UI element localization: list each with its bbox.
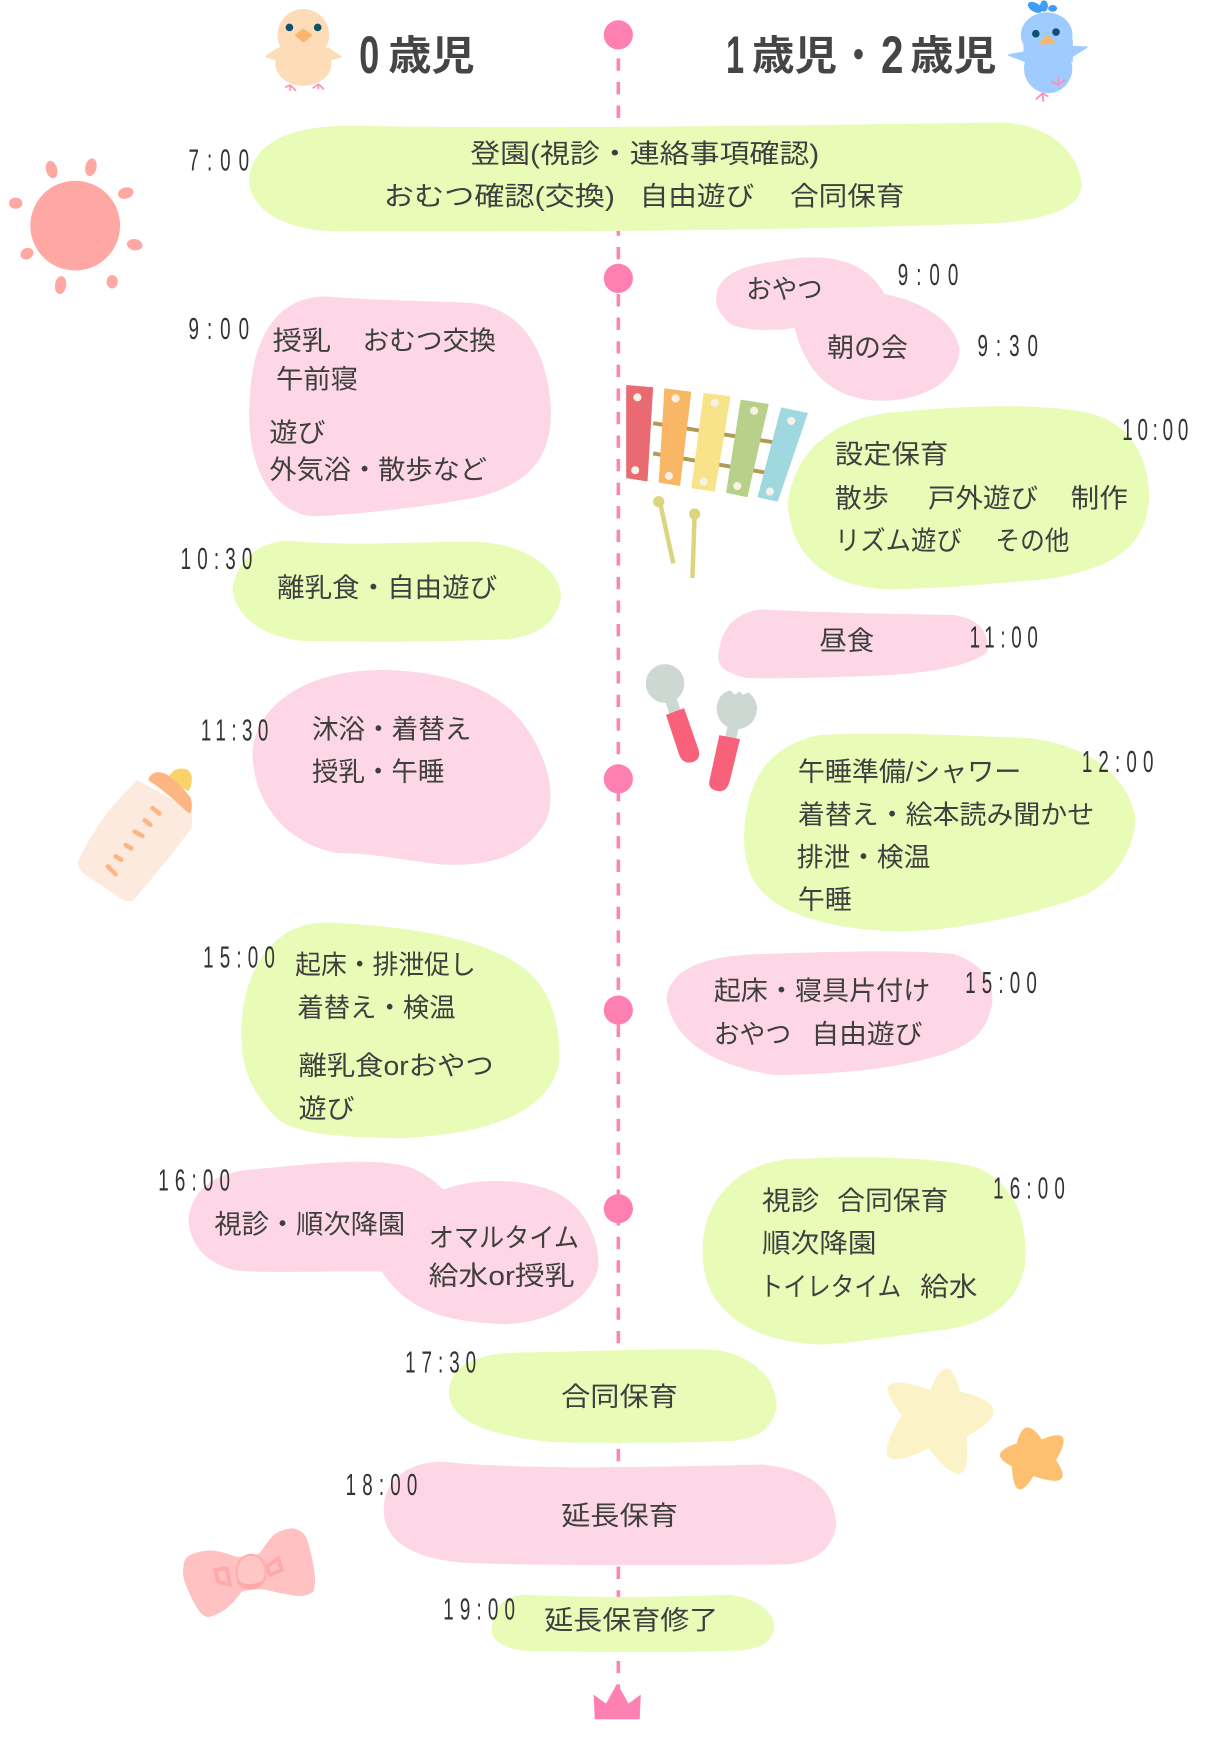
text: 起床・排泄促し: 起床・排泄促し (295, 950, 476, 980)
time: 16:00 right: 16:00 (993, 1172, 1065, 1206)
text: 登園 lines (384, 139, 905, 211)
icon: spoon (646, 664, 699, 763)
text: 離乳食・自由遊び: 離乳食・自由遊び (277, 573, 497, 603)
icon: cream star (887, 1368, 994, 1474)
text: 起床・排泄促し (295, 950, 494, 1124)
text: 合同保育: 合同保育 (561, 1382, 678, 1412)
text: 視診 合同保育: 合同保育 (837, 1186, 948, 1216)
text: 視診 合同保育: 順次降園 (762, 1228, 876, 1258)
text: 視診・順次降園: オマルタイム (429, 1223, 579, 1253)
text: 視診 合同保育 (760, 1186, 978, 1302)
timeline dots (604, 20, 633, 1223)
panel: 起床 寝具片付け (667, 951, 992, 1075)
icon: xylophone (626, 385, 808, 502)
text: 視診・順次降園: 視診・順次降園 (214, 1209, 405, 1239)
time: 16:00: 16:00 (158, 1164, 230, 1198)
text: 沐浴・着替え (312, 714, 471, 787)
text: 授乳 おむつ交換: 授乳 (273, 326, 331, 356)
text: 登園 lines: 合同保育 (790, 181, 905, 211)
heading: 1歳児・2歳児: ・ (842, 33, 875, 79)
text: 起床・寝具片付け (714, 976, 930, 1050)
panel: 昼食 (718, 609, 988, 678)
text: 起床・寝具片付け: 起床・寝具片付け (714, 976, 930, 1006)
text: おやつ 朝の会: 朝の会 (827, 333, 908, 363)
text: 設定保育: 散歩 (835, 483, 889, 513)
heading: 1歳児・2歳児: 歳児 (910, 33, 997, 79)
text: 沐浴・着替え: 授乳・午睡 (312, 757, 444, 787)
timeline dashed line (617, 35, 620, 1695)
text: 午睡準備/シャワー: 排泄・検温 (797, 842, 930, 872)
panel: 合同保育 (449, 1349, 777, 1443)
text: 授乳 おむつ交換: おむつ交換 (362, 326, 496, 356)
text: 授乳 おむつ交換: 午前寝 (276, 364, 358, 394)
text: 登園 lines: 登園(視診・連絡事項確認) (470, 139, 819, 169)
text: おやつ 朝の会 (746, 275, 908, 363)
text: 設定保育: 設定保育 (835, 440, 948, 470)
text: 起床・排泄促し: 離乳食orおやつ (299, 1051, 494, 1081)
panel: おやつ 朝の会 (716, 257, 960, 401)
icon: sun (9, 157, 143, 295)
time: 19:00: 19:00 (443, 1593, 515, 1627)
heading: 1歳児・2歳児 (726, 26, 997, 85)
panel: 0歳児 10:30 (232, 541, 561, 642)
panel: 設定保育 (788, 406, 1149, 589)
text: 視診 合同保育: 視診 (762, 1186, 819, 1216)
panel: 視診 合同保育 (703, 1157, 1026, 1344)
icon: blue bird (1009, 0, 1087, 102)
icon: bow (183, 1528, 315, 1617)
time: 15:00: 15:00 (203, 941, 275, 975)
text: 起床・排泄促し: 着替え・検温 (297, 993, 456, 1023)
heading: 1歳児・2歳児: 歳児 (752, 33, 837, 79)
panel: 登園 (249, 122, 1082, 232)
text: 昼食: 昼食 (819, 626, 874, 656)
time: 9:30: 9:30 (977, 329, 1038, 363)
text: 起床・寝具片付け: 自由遊び (811, 1020, 923, 1050)
text: 視診 合同保育: 給水 (920, 1272, 978, 1302)
heading: 1歳児・2歳児: 2 (881, 26, 903, 85)
text: 延長保育: 延長保育 (561, 1501, 678, 1531)
time: 12:00: 12:00 (1082, 746, 1153, 779)
panel: 0歳児 11:30 (252, 670, 551, 865)
text: 沐浴・着替え: 沐浴・着替え (312, 714, 471, 744)
panel: 延長保育 (384, 1462, 836, 1565)
icon: orange star (1000, 1427, 1064, 1490)
time: 7:00: 7:00 (189, 144, 249, 178)
time: 15:00 right: 15:00 (965, 967, 1037, 1000)
time: 18:00: 18:00 (346, 1468, 417, 1502)
text: 視診・順次降園: 給水or授乳 (429, 1261, 575, 1291)
text: 登園 lines: 自由遊び (640, 181, 754, 211)
icon: fork (709, 690, 757, 791)
text: 午睡準備/シャワー (797, 757, 1094, 915)
panel: 延長保育修了 (492, 1595, 774, 1652)
text: 午睡準備/シャワー: 午睡 (798, 885, 852, 915)
heading: 0歳児: 歳児 (388, 33, 475, 79)
time: 10:00 top right: 10:00 (1122, 414, 1188, 447)
text: 授乳 おむつ交換 (269, 326, 496, 485)
panel: 0歳児 15:00 (241, 923, 559, 1138)
text: 設定保育: 戸外遊び (928, 483, 1038, 513)
text: 設定保育 (835, 440, 1128, 556)
time: 10:30: 10:30 (181, 543, 252, 576)
text: おやつ 朝の会: おやつ (746, 275, 823, 305)
text: 設定保育: リズム遊び (835, 526, 962, 556)
text: 起床・寝具片付け: おやつ (714, 1020, 791, 1050)
icon: baby bottle (78, 769, 192, 901)
time: 9:00 right: 9:00 (898, 259, 958, 292)
time: 11:30: 11:30 (201, 714, 268, 748)
icon: crown (594, 1683, 641, 1719)
heading: 1歳児・2歳児: 1 (726, 26, 744, 85)
text: 授乳 おむつ交換: 外気浴・散歩など (269, 455, 487, 485)
time: 17:30: 17:30 (405, 1346, 476, 1380)
icon: chick (266, 9, 341, 91)
text: 延長保育修了: 延長保育修了 (544, 1606, 718, 1636)
text: 設定保育: 制作 (1071, 483, 1128, 513)
text: 視診 合同保育: トイレタイム (760, 1272, 901, 1302)
time: 11:00: 11:00 (970, 621, 1038, 655)
icon: mallets (653, 496, 700, 578)
text: 設定保育: その他 (995, 526, 1069, 556)
time: 9:00: 9:00 (189, 313, 249, 346)
panel: 0歳児 9:00 (249, 296, 551, 516)
text: 午睡準備/シャワー: 午睡準備/シャワー (798, 757, 1021, 787)
text: 登園 lines: おむつ確認(交換) (384, 181, 615, 211)
heading: 0歳児 (359, 26, 475, 85)
text: 視診・順次降園 (214, 1209, 579, 1291)
text: 授乳 おむつ交換: 遊び (269, 418, 326, 448)
panel: 0歳児 16:00 (189, 1162, 598, 1324)
text: 起床・排泄促し: 遊び (299, 1094, 355, 1124)
text: 午睡準備/シャワー: 着替え・絵本読み聞かせ (798, 800, 1094, 830)
panel: 午睡準備 (744, 734, 1136, 932)
heading: 0歳児: 0 (359, 26, 379, 85)
